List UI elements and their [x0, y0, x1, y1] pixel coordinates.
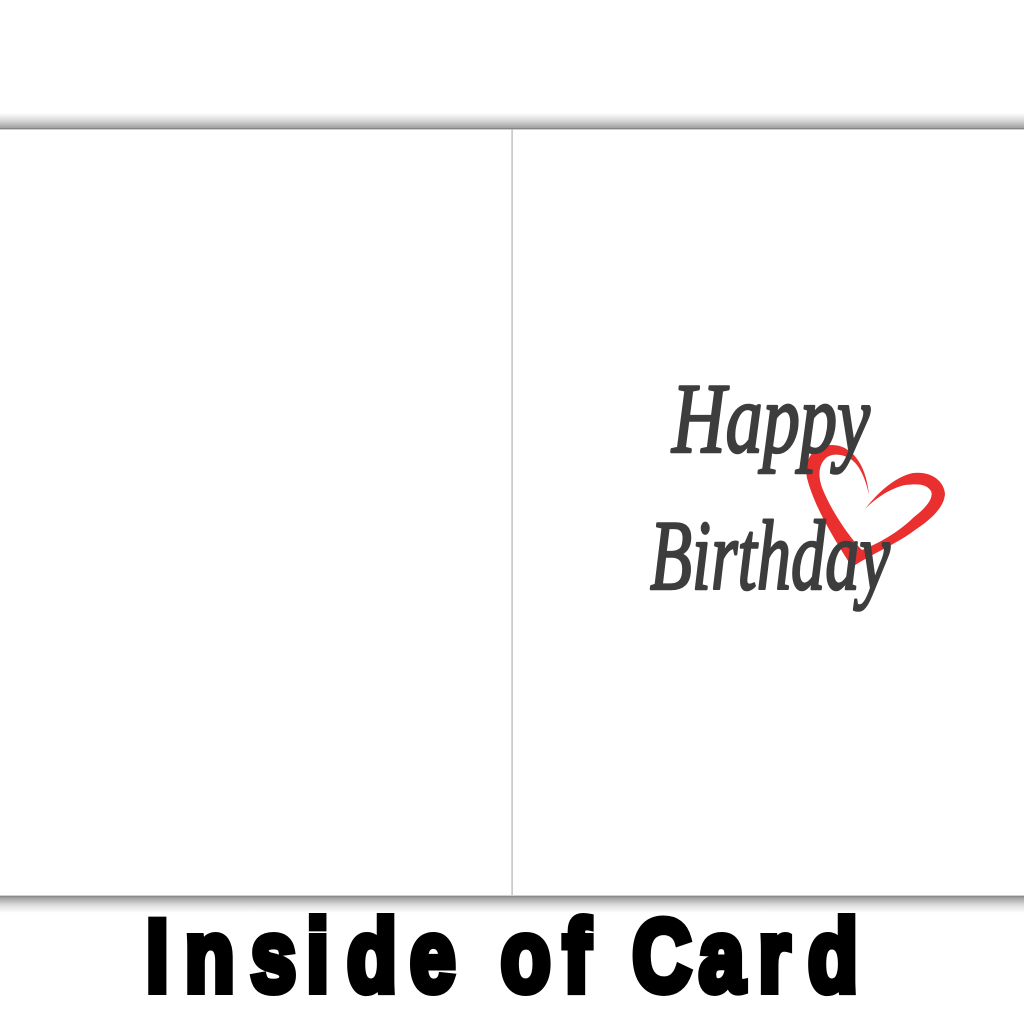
caption: Inside of Card: Inside of Card — [146, 898, 858, 1013]
text: Birthday: Birthday — [650, 500, 890, 611]
icon: red brush heart — [806, 445, 945, 567]
greeting: Happy Birthday — [650, 363, 890, 611]
text: Happy: Happy — [671, 363, 870, 474]
panel: fold line — [511, 129, 513, 895]
card: open inside spread with shadow — [0, 113, 1024, 913]
